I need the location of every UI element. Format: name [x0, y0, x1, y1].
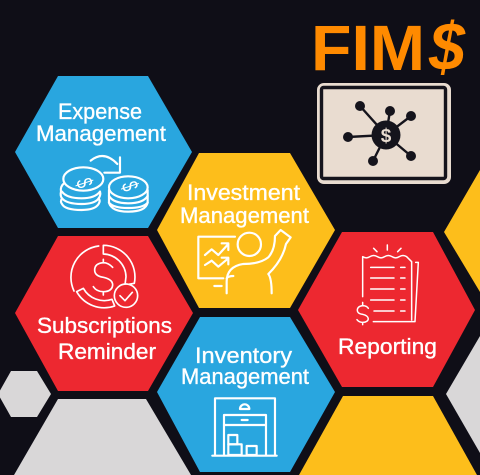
heading: inventory management: Inventory [195, 343, 292, 368]
heading: reporting: Reporting [338, 334, 437, 359]
heading: investment management [180, 180, 309, 228]
panel: inventory management [157, 317, 335, 472]
background hexagon: yellow bottom [299, 396, 477, 475]
icon: presenter with chart [198, 230, 291, 293]
heading: investment management: Management [180, 203, 309, 228]
icon: dollar cycle with check [71, 245, 138, 308]
title [311, 9, 466, 85]
hexagon: blue [15, 76, 192, 228]
heading: investment management: Investment [187, 180, 300, 205]
hexagon: yellow [157, 153, 335, 308]
title: FIM [311, 12, 425, 84]
background hexagon: grey small [0, 371, 51, 417]
icon: receipt [357, 245, 418, 325]
heading: subscriptions reminder: Reminder [58, 339, 156, 364]
hexagon: blue [157, 317, 335, 472]
icon: money network: $ [381, 126, 392, 147]
hexagon: red [15, 236, 193, 391]
background hexagon: grey right [446, 336, 480, 453]
title: $ [428, 9, 466, 85]
heading: inventory management: Management [181, 364, 309, 389]
hexagon: red [298, 232, 475, 387]
background hexagon: yellow top right [444, 170, 480, 292]
panel: investment management [157, 153, 335, 308]
icon: coins with arrow [61, 156, 148, 212]
heading: expense management: Management [36, 121, 166, 146]
panel: logo badge [318, 84, 450, 183]
panel: subscriptions reminder [15, 236, 193, 391]
icon: coins with arrow: $ [70, 175, 97, 191]
background hexagon: grey bottom left [14, 399, 191, 475]
icon: warehouse [212, 398, 277, 456]
icon: coins with arrow: $ [116, 178, 143, 194]
heading: subscriptions reminder: Subscriptions [37, 313, 172, 338]
heading: expense management [36, 99, 166, 146]
panel: expense management [15, 76, 192, 228]
heading: expense management: Expense [58, 99, 142, 124]
heading: inventory management [181, 343, 309, 389]
panel: reporting [298, 232, 475, 387]
heading: subscriptions reminder [37, 313, 172, 364]
